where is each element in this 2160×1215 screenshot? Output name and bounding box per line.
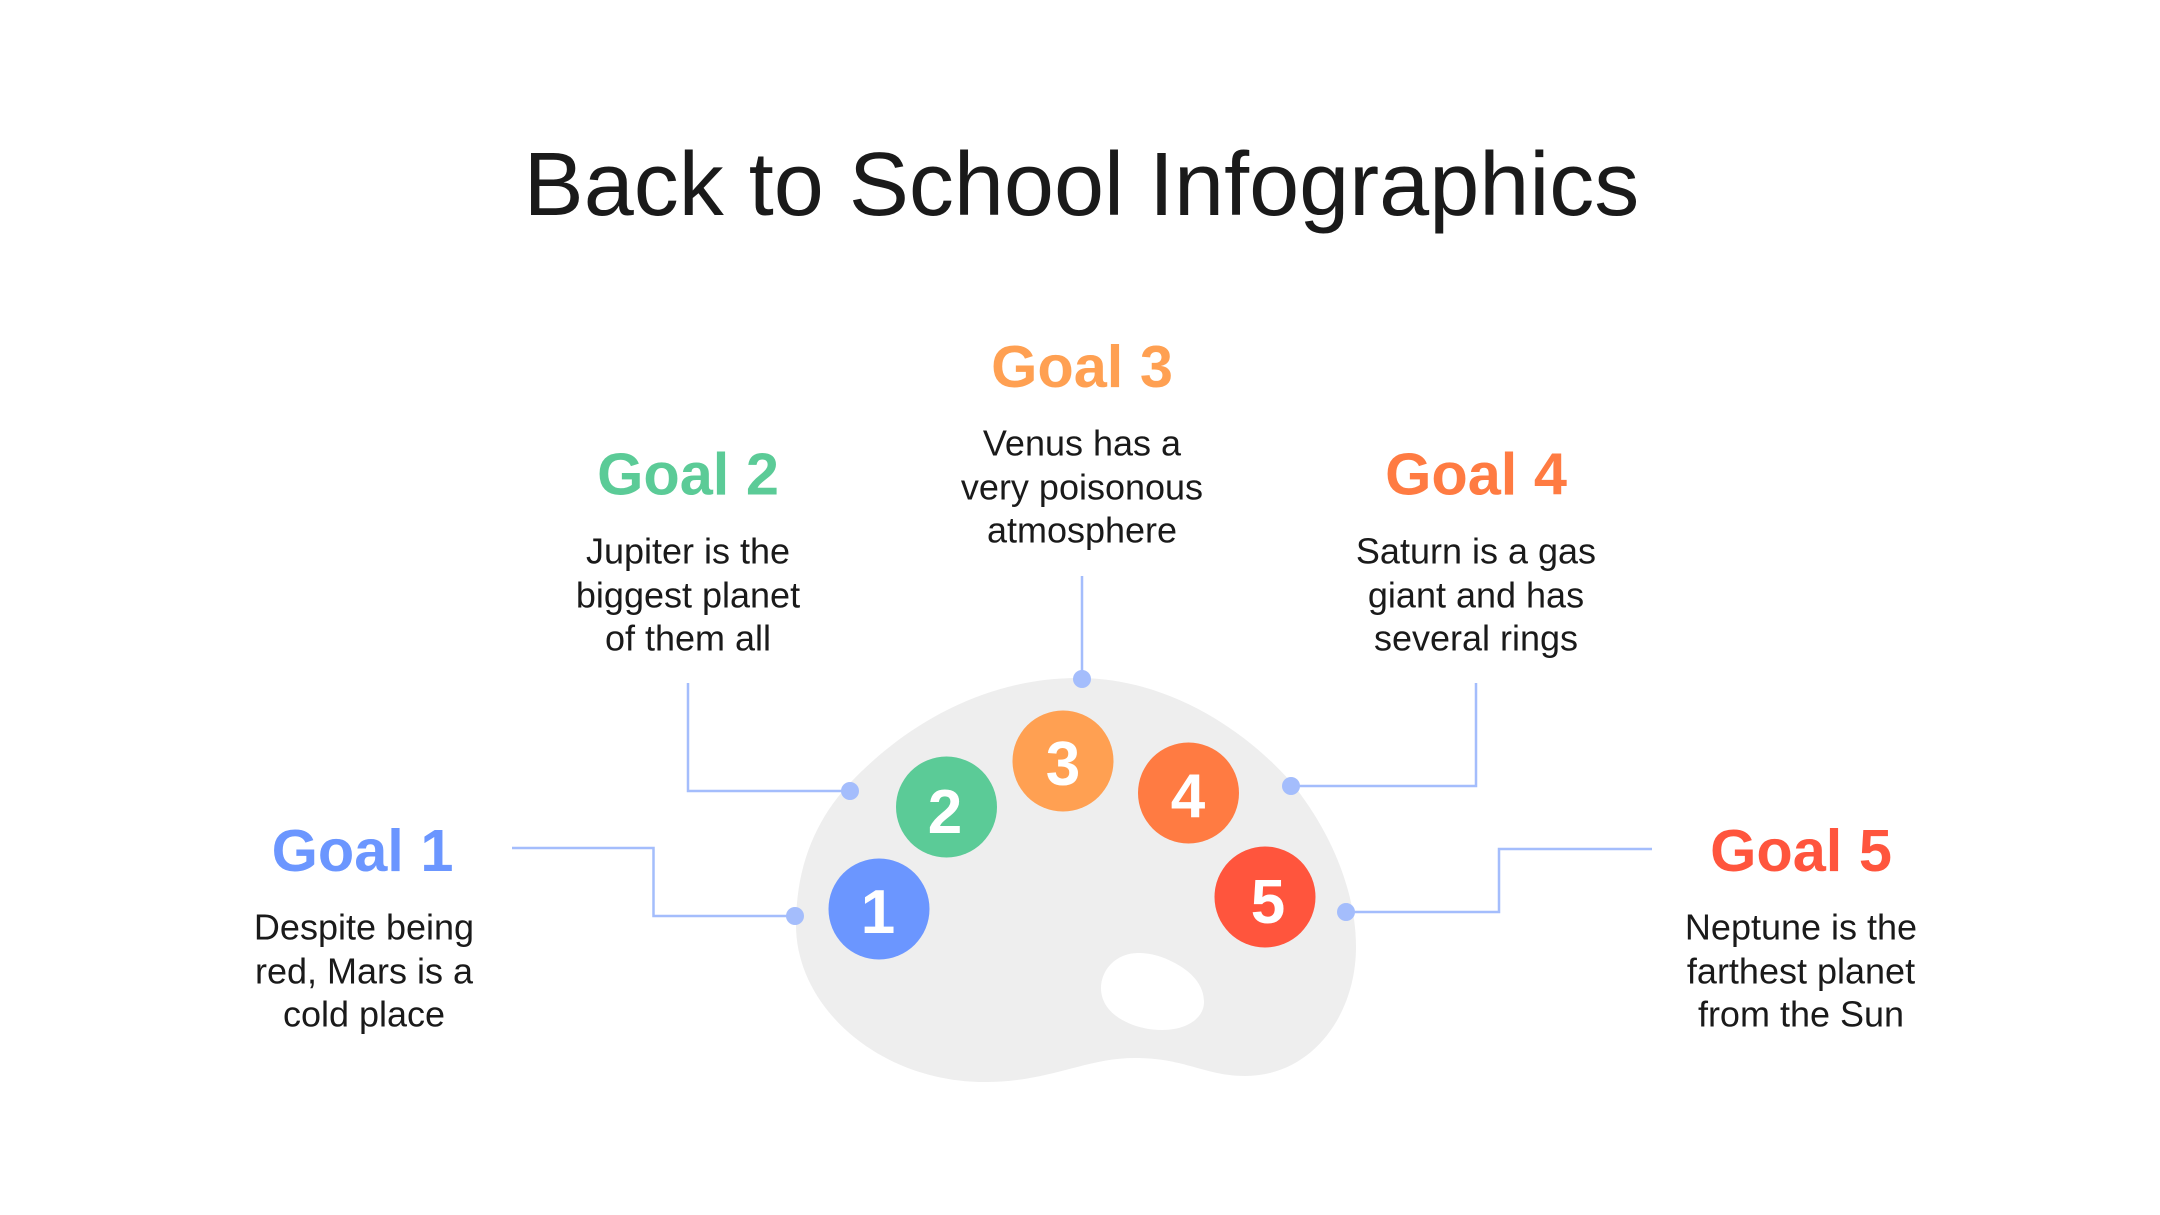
- goal 4 block: Saturn is a gas: [1356, 530, 1596, 572]
- goal 2 block: Goal 2: [597, 440, 779, 508]
- goal 3 block: [961, 333, 1203, 550]
- goal 2 block: Jupiter is the: [586, 530, 790, 572]
- marker 2: [896, 756, 997, 858]
- goal 1 block: Goal 1: [272, 817, 453, 884]
- marker 4: [1138, 742, 1239, 844]
- goal 5 block: [1685, 817, 1917, 1034]
- marker 3: [1012, 710, 1114, 812]
- goal 5 block: farthest planet: [1687, 950, 1915, 992]
- marker 1: 1: [861, 878, 895, 947]
- connector: goal 5: [1337, 849, 1652, 921]
- goal 1 block: [254, 817, 474, 1034]
- goal 4 block: giant and has: [1368, 574, 1584, 616]
- title: Back to School Infographics: [524, 135, 1639, 235]
- goal 1 block: Despite being: [254, 906, 474, 948]
- goal 4 block: Goal 4: [1385, 440, 1567, 508]
- goal 3 block: very poisonous: [961, 466, 1203, 508]
- connector: goal 3: [1073, 576, 1091, 688]
- connector: goal 4: [1282, 683, 1476, 795]
- goal 5 block: Neptune is the: [1685, 906, 1917, 948]
- goal 5 block: Goal 5: [1710, 817, 1892, 884]
- connector: goal 2: [688, 683, 859, 800]
- marker 3: 3: [1046, 730, 1080, 799]
- goal 3 block: atmosphere: [987, 510, 1177, 550]
- marker 5: [1214, 846, 1316, 948]
- goal 3 block: Venus has a: [983, 422, 1182, 464]
- goal 2 block: biggest planet: [576, 574, 800, 616]
- goal 3 block: Goal 3: [991, 333, 1173, 400]
- connector: goal 1: [512, 848, 804, 925]
- marker 1: [828, 858, 930, 960]
- marker 5: 5: [1251, 868, 1285, 937]
- goal 1 block: cold place: [283, 994, 445, 1034]
- goal 5 block: from the Sun: [1698, 994, 1904, 1034]
- goal 4 block: [1356, 440, 1596, 658]
- marker 4: 4: [1171, 762, 1206, 831]
- goal 2 block: [576, 440, 800, 658]
- goal 1 block: red, Mars is a: [255, 950, 474, 992]
- marker 2: 2: [928, 778, 962, 847]
- goal 2 block: of them all: [605, 618, 771, 658]
- goal 4 block: several rings: [1374, 618, 1578, 658]
- palette: [796, 678, 1356, 1082]
